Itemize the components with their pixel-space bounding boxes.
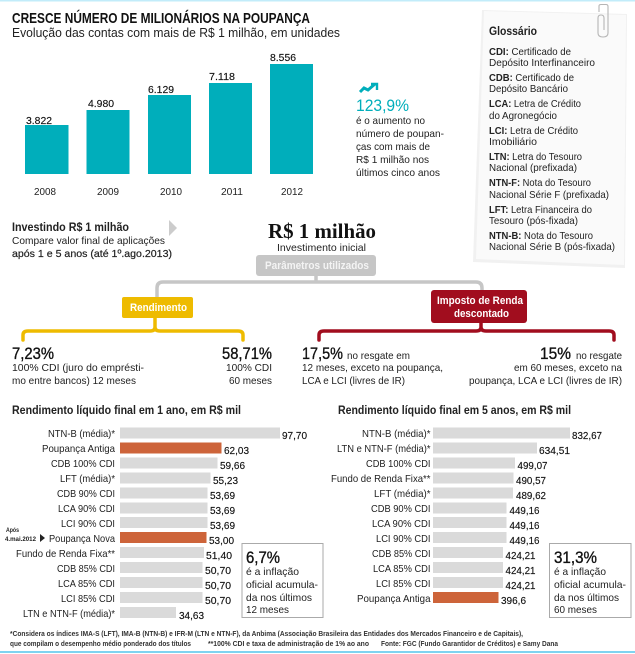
text block: 17,5%: 17,5% [302,345,343,363]
bar chart: accounts over R$ 1 million: 7.118 [209,71,235,83]
panel: glossary: Imobiliário [489,136,537,148]
bar chart: net yield after 1 year: 97,70 [282,430,307,442]
bar chart: net yield after 1 year: LFT (média)* [60,473,115,485]
bar chart: net yield after 5 years: Fundo de Renda Fixa** [331,473,430,485]
text block: 58,71%: 60 meses [229,375,272,387]
label: parameters used: Parâmetros utilizados [265,260,369,272]
icon: grey pointer arrow [169,220,177,236]
callout: inflation 60 months: oficial acumula- [554,579,626,591]
panel: glossary: Nacional (prefixada) [489,162,577,174]
callout: 123,9% growth: número de poupan- [356,128,444,140]
bracket: yield [23,318,243,340]
callout: inflation 12 months: 6,7% [246,549,280,567]
text block: 7,23%: mo entre bancos) 12 meses [12,375,136,387]
bar chart: net yield after 5 years [331,428,602,607]
panel: glossary: LCI: Letra de Crédito [489,125,578,137]
text block: 58,71%: 100% CDI [226,362,272,374]
text block: 58,71% [222,345,272,387]
bar chart: net yield after 1 year: 50,70 [205,580,231,592]
callout: inflation 12 months: 12 meses [246,604,289,616]
bar chart: accounts over R$ 1 million: 2010 [160,186,182,198]
bar chart: net yield after 1 year: 50,70 [205,595,231,607]
bar chart: net yield after 1 year: 51,40 [206,550,232,562]
label: yield: Rendimento [130,302,187,314]
panel: glossary: LTN: Letra do Tesouro [489,151,582,163]
panel: glossary: NTN-B: Nota do Tesouro [489,230,593,242]
icon: rising arrow [360,84,377,92]
bar chart: accounts over R$ 1 million: 2012 [281,186,303,198]
bar chart: net yield after 1 year: Fundo de Renda Fixa** [16,548,115,560]
callout: 123,9% growth: 123,9% [356,97,409,115]
heading: initial investment: Investimento inicial [277,242,366,254]
panel: glossary: Nacional Série F (prefixada) [489,189,609,201]
bar chart: net yield after 1 year: CDB 100% CDI [51,458,115,470]
connector: parameters to branches [157,276,482,297]
panel: glossary: LFT: Letra Financeira do [489,204,592,216]
bar chart: net yield after 1 year: CDB 90% CDI [57,488,115,500]
bar chart: net yield after 1 year: LCA 85% CDI [58,578,115,590]
bar chart: accounts over R$ 1 million: 2008 [34,186,56,198]
bar chart: net yield after 5 years: LFT (média)* [374,488,430,500]
bar chart: net yield after 5 years: 449,16 [510,520,540,532]
callout: inflation 12 months [242,544,323,618]
bar chart: net yield after 1 year: Poupança Nova [49,533,115,545]
panel: glossary: Depósito Bancário [489,83,568,95]
bar chart: net yield after 5 years: LTN e NTN-F (média)* [337,443,430,455]
panel: glossary: Depósito Interfinanceiro [489,57,595,69]
icon: paperclip [598,4,608,37]
callout: inflation 60 months: 31,3% [554,549,597,567]
heading: investing R$ 1 million: após 1 e 5 anos (até 1º.ago.2013) [12,248,172,260]
bar chart: net yield after 1 year: 53,69 [210,490,235,502]
bar chart: net yield after 1 year: LCA 90% CDI [58,503,115,515]
callout: inflation 12 months: oficial acumula- [246,579,318,591]
text block: 15%: 15% [540,345,571,363]
bar chart: net yield after 5 years: 396,6 [501,595,526,607]
text block: 17,5%: no resgate em [347,350,410,362]
callout: inflation 60 months [550,544,631,618]
bar chart: net yield after 5 years: CDB 85% CDI [372,548,430,560]
callout: 123,9% growth: R$ 1 milhão nos [356,154,429,166]
panel: glossary: Tesouro (pós-fixada) [489,215,578,227]
heading: investing R$ 1 million [12,222,172,260]
panel: glossary: LCA: Letra de Crédito [489,98,581,110]
panel: glossary: Glossário [489,24,537,38]
bar chart: net yield after 5 years: 634,51 [539,445,570,457]
subtitle: Evolução das contas com mais de R$ 1 milhão, em unidades [12,25,340,40]
callout: inflation 12 months: da nos últimos [246,592,312,604]
label: yield [122,297,193,318]
bar chart: net yield after 5 years: 424,21 [506,565,536,577]
bar chart: net yield after 1 year: 55,23 [213,475,238,487]
bar chart: accounts over R$ 1 million: 2011 [221,186,243,198]
bar chart: net yield after 5 years: 424,21 [506,580,536,592]
bar chart: net yield after 1 year: LCI 85% CDI [61,593,115,605]
callout: inflation 60 months: 60 meses [554,604,597,616]
bar chart: net yield after 5 years: 499,07 [518,460,548,472]
callout: 123,9% growth [356,84,444,179]
panel: glossary: Nacional Série B (pós-fixada) [489,241,615,253]
bar chart: accounts over R$ 1 million: 2009 [97,186,119,198]
bar chart: accounts over R$ 1 million [25,52,313,198]
text block: 17,5% [302,345,443,387]
text block: 15%: poupança, LCA e LCI (livres de IR) [469,375,622,387]
bar chart: net yield after 1 year: CDB 85% CDI [57,563,115,575]
bar chart: net yield after 5 years: 490,57 [516,475,546,487]
heading: initial investment [268,219,376,254]
bar chart: accounts over R$ 1 million: 3.822 [26,115,52,127]
callout: inflation 12 months: é a inflação [246,566,299,578]
bar chart: accounts over R$ 1 million: 8.556 [270,52,296,64]
text block: 17,5%: LCA e LCI (livres de IR) [302,375,405,387]
text block: 7,23%: 100% CDI (juro do emprésti- [12,362,144,374]
footnotes and source: **100% CDI e taxa de administração de 1% ao ano [208,639,370,648]
text block: 7,23% [12,345,144,387]
callout: inflation 60 months: é a inflação [554,566,606,578]
heading: initial investment: R$ 1 milhão [268,219,376,243]
heading: investing R$ 1 million: Compare valor final de aplicações [12,235,165,247]
bracket: income tax [319,322,614,340]
heading: 5-year chart: Rendimento líquido final em 5 anos, em R$ mil [338,405,571,417]
bar chart: accounts over R$ 1 million: 4.980 [88,98,114,110]
heading: 1-year chart: Rendimento líquido final em 1 ano, em R$ mil [12,405,241,417]
panel: glossary: NTN-F: Nota do Tesouro [489,177,591,189]
bar chart: net yield after 1 year: LTN e NTN-F (média)* [23,608,115,620]
bar chart: net yield after 5 years: 424,21 [506,550,536,562]
bar chart: net yield after 1 year: 53,69 [210,505,235,517]
bar chart: net yield after 1 year: Poupança Antiga [42,443,115,455]
bar chart: accounts over R$ 1 million: 6.129 [148,84,174,96]
text block: 15% [469,345,622,387]
footnotes and source: *Considera os índices IMA-S (LFT), IMA-B (NTN-B) e IFR-M (LTN e NTN-F), da Anbima (Associação Brasileira das Entidades dos Mercados Financeiro e de Capitais), [10,629,523,638]
text block: 7,23%: 7,23% [12,345,54,363]
text block: 15%: no resgate [576,350,622,362]
text block: 17,5%: 12 meses, exceto na poupança, [302,362,443,374]
footnotes and source: que compilam o desempenho médio ponderado dos títulos [10,639,191,648]
label: parameters used [256,255,376,276]
bar chart: net yield after 5 years: LCI 90% CDI [376,533,430,545]
heading: investing R$ 1 million: Investindo R$ 1 milhão [12,222,129,234]
text block: 15%: em 60 meses, exceto na [514,362,622,374]
footnotes and source [10,629,559,648]
title: CRESCE NÚMERO DE MILIONÁRIOS NA POUPANÇA [12,9,310,27]
bar chart: net yield after 1 year: 53,00 [209,535,234,547]
callout: 123,9% growth: últimos cinco anos [356,167,440,179]
bar chart: net yield after 1 year: 34,63 [179,610,204,622]
bar chart: net yield after 5 years: 489,62 [516,490,546,502]
label: income tax withheld: Imposto de Renda [437,295,524,307]
bar chart: net yield after 5 years: CDB 100% CDI [366,458,430,470]
callout: inflation 60 months: da nos últimos [554,592,619,604]
bar chart: net yield after 5 years: Poupança Antiga [357,593,431,605]
bar chart: net yield after 5 years: LCI 85% CDI [376,578,430,590]
bar chart: net yield after 5 years: LCA 90% CDI [372,518,430,530]
bar chart: net yield after 1 year: 62,03 [224,445,249,457]
callout: 123,9% growth: ças com mais de [356,141,430,153]
footnotes and source: Fonte: FGC (Fundo Garantidor de Créditos) e Samy Dana [381,639,559,648]
label: income tax withheld [431,290,527,323]
bar chart: net yield after 1 year: NTN-B (média)* [48,428,115,440]
bar chart: net yield after 5 years: LCA 85% CDI [373,563,430,575]
bar chart: net yield after 5 years: NTN-B (média)* [362,428,430,440]
bar chart: net yield after 5 years: 449,16 [510,505,540,517]
panel: glossary: CDB: Certificado de [489,72,574,84]
note: after 4 May 2012 [5,527,45,543]
bar chart: net yield after 5 years: CDB 90% CDI [371,503,430,515]
bar chart: net yield after 5 years: 832,67 [572,430,602,442]
panel: glossary [473,4,627,268]
note: after 4 May 2012: Após [6,527,19,534]
bar chart: net yield after 1 year [16,428,307,622]
callout: 123,9% growth: é o aumento no [356,115,425,127]
panel: glossary: do Agronegócio [489,110,557,122]
bar chart: net yield after 1 year: LCI 90% CDI [61,518,115,530]
bar chart: net yield after 5 years: 449,16 [510,535,540,547]
bar chart: net yield after 1 year: 59,66 [220,460,245,472]
note: after 4 May 2012: 4.mai.2012 [5,536,36,543]
panel: glossary: CDI: Certificado de [489,46,571,58]
text block: 58,71%: 58,71% [222,345,272,363]
bar chart: net yield after 1 year: 50,70 [205,565,231,577]
bar chart: net yield after 1 year: 53,69 [210,520,235,532]
label: income tax withheld: descontado [454,308,509,320]
